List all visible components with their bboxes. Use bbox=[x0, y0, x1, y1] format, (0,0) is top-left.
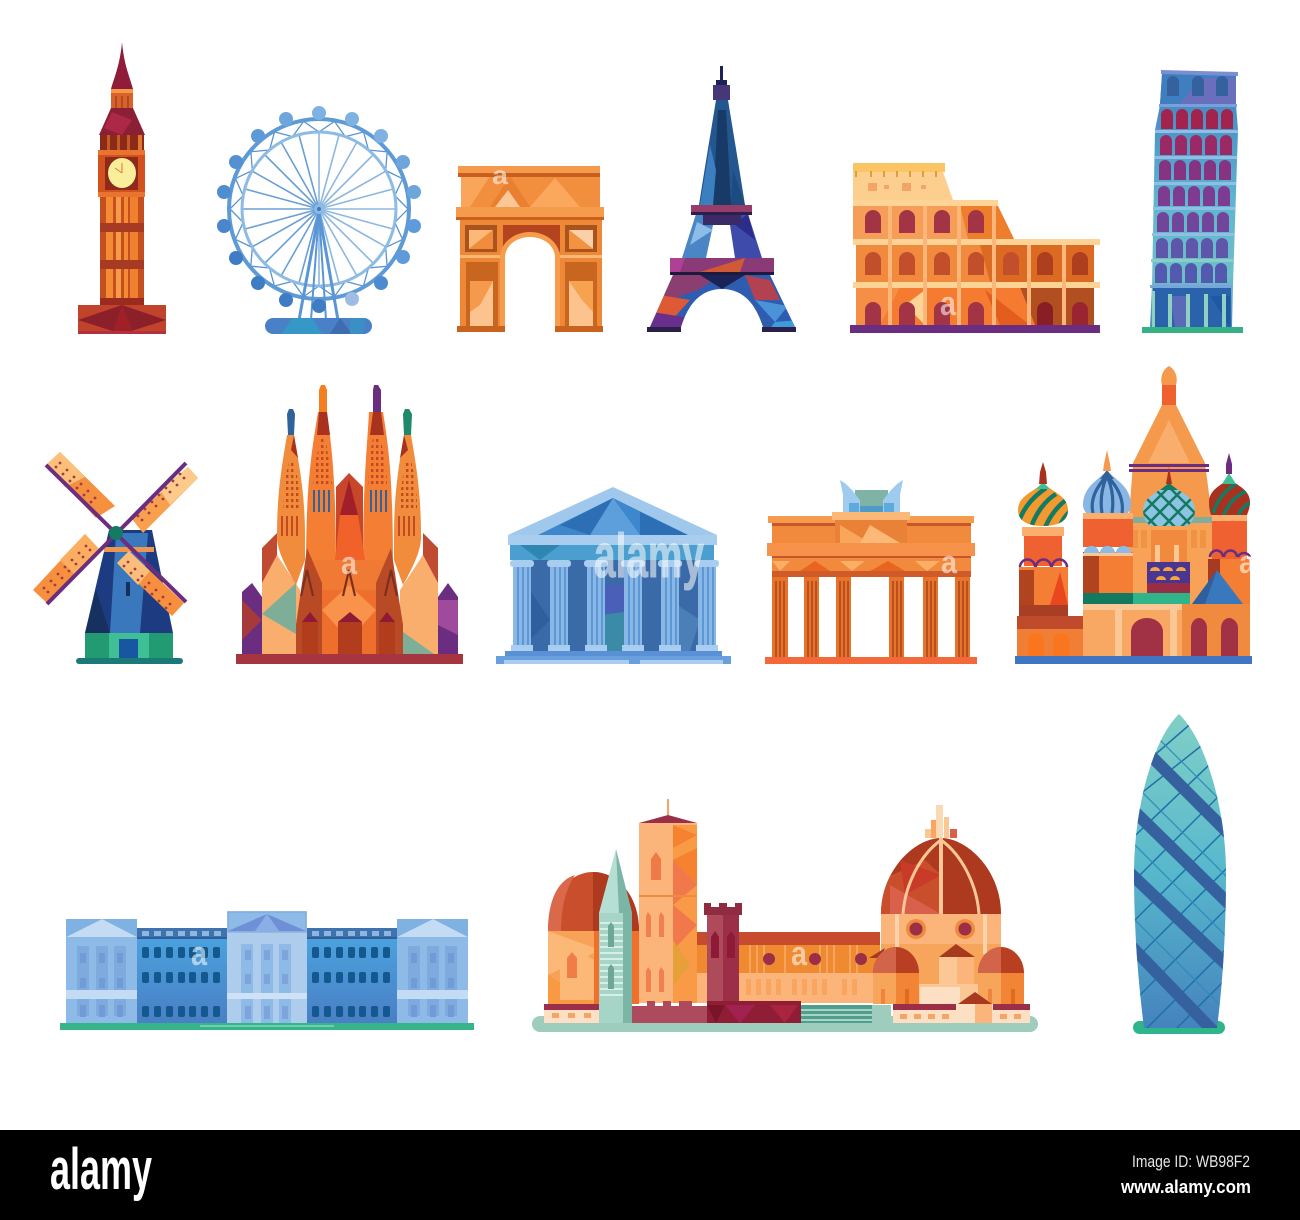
right wing bbox=[397, 919, 468, 1023]
landmark: Arc de Triomphe bbox=[456, 166, 604, 332]
patterned window bbox=[1147, 562, 1190, 593]
footer bar bbox=[0, 1130, 1300, 1220]
central pavilion bbox=[227, 911, 307, 1023]
attic bbox=[853, 163, 953, 200]
tower shaft bbox=[100, 197, 144, 305]
arches bbox=[865, 210, 1088, 325]
landmark: Leaning Tower of Pisa bbox=[1142, 70, 1243, 333]
frieze bbox=[508, 535, 717, 560]
up-right grid lines bbox=[1134, 724, 1226, 1028]
website: www.alamy.com bbox=[1120, 1177, 1251, 1197]
watermarks: a bbox=[940, 285, 957, 323]
windmill blades bbox=[33, 452, 198, 616]
pilasters bbox=[888, 206, 1066, 325]
left wing bbox=[66, 919, 137, 1023]
cornice bbox=[767, 543, 975, 577]
landmark: Brandenburg Gate bbox=[765, 480, 977, 664]
landmark: Eiffel Tower bbox=[640, 66, 800, 335]
columns bbox=[510, 560, 719, 651]
hub bbox=[109, 526, 123, 540]
central gable bbox=[335, 473, 365, 600]
capsules bbox=[217, 106, 421, 313]
tower body bbox=[1150, 74, 1238, 327]
right block bbox=[307, 928, 397, 1023]
portals bbox=[302, 612, 395, 654]
gallery arches bbox=[1155, 109, 1233, 283]
crenellated tower bbox=[704, 903, 742, 1003]
landmark: Florence skyline bbox=[532, 799, 1038, 1032]
blade shafts bbox=[46, 463, 186, 604]
wheel base bbox=[265, 318, 372, 334]
green ground bbox=[60, 1023, 474, 1030]
down-right grid lines bbox=[1134, 740, 1226, 1006]
cathedral dome bbox=[881, 838, 1001, 914]
nave bbox=[697, 932, 880, 1003]
landmark: Buckingham Palace bbox=[60, 911, 474, 1030]
columns bbox=[772, 577, 970, 657]
watermarks bbox=[191, 160, 1255, 973]
watermarks: a bbox=[791, 935, 808, 973]
blade dots bbox=[43, 462, 185, 609]
plinth bbox=[850, 325, 1100, 333]
crenellated wall bbox=[632, 1001, 801, 1023]
antenna bbox=[713, 66, 730, 100]
side wings bbox=[262, 533, 438, 654]
lower legs bbox=[650, 275, 795, 327]
attic bbox=[768, 512, 974, 543]
middle legs bbox=[682, 214, 762, 258]
purple side towers bbox=[242, 583, 458, 654]
landmark: Windmill bbox=[33, 452, 198, 664]
teal steps bbox=[801, 1005, 891, 1023]
main block bbox=[460, 220, 602, 326]
hub bbox=[314, 204, 324, 214]
cathedral annex bbox=[893, 984, 1030, 1023]
landmark: Colosseum bbox=[850, 163, 1100, 333]
attic bbox=[458, 166, 600, 207]
quadriga bbox=[840, 480, 903, 512]
outer spires bbox=[277, 409, 421, 585]
cella wall bbox=[515, 560, 710, 651]
small right dome bbox=[978, 947, 1024, 1004]
green spire tower bbox=[599, 849, 632, 1023]
landmark: Sagrada Familia bbox=[236, 385, 463, 664]
spokes bbox=[242, 132, 396, 286]
clock block bbox=[98, 150, 145, 197]
watermarks: a bbox=[492, 160, 509, 190]
small left dome bbox=[873, 947, 919, 1004]
central spire bbox=[1129, 366, 1212, 517]
left block bbox=[137, 928, 227, 1023]
landmark: London Eye bbox=[217, 106, 421, 334]
blue base bbox=[1015, 656, 1252, 664]
green base bbox=[1142, 327, 1243, 333]
platform two bbox=[670, 258, 774, 275]
central nave bbox=[1128, 517, 1212, 607]
louvers bbox=[100, 135, 144, 150]
tier two bbox=[853, 200, 1014, 239]
campanile bbox=[639, 799, 697, 1003]
mill body bbox=[85, 530, 173, 633]
base bbox=[236, 654, 463, 664]
landmark: Saint Basil's Cathedral bbox=[1015, 366, 1252, 664]
watermarks: a bbox=[191, 935, 208, 973]
ground slab bbox=[532, 1016, 1038, 1032]
spire windows bbox=[283, 437, 417, 510]
landmark: Pantheon bbox=[496, 487, 731, 664]
landmark: The Gherkin bbox=[1133, 714, 1226, 1034]
left tower bbox=[1017, 527, 1083, 656]
lattice onion dome bbox=[1143, 467, 1195, 526]
upper section bbox=[699, 100, 745, 205]
glass body bbox=[1134, 714, 1226, 1028]
blue pyramid bbox=[1192, 570, 1243, 604]
floor bands bbox=[1150, 104, 1238, 288]
lower facade bbox=[296, 548, 403, 654]
pediment bbox=[508, 487, 717, 535]
blue onion dome bbox=[1083, 450, 1131, 513]
support legs bbox=[299, 212, 338, 320]
lantern bbox=[925, 805, 957, 838]
platform one bbox=[691, 205, 752, 215]
inner spires bbox=[306, 385, 393, 570]
left dome and drum bbox=[548, 872, 639, 1004]
landmark: Big Ben bbox=[78, 42, 166, 334]
image id: Image ID: WB98F2 bbox=[1132, 1152, 1250, 1171]
watermarks: alamy bbox=[594, 522, 704, 591]
cathedral drum bbox=[881, 914, 1001, 1003]
stepped platform bbox=[496, 651, 731, 664]
front chapel gable bbox=[869, 944, 975, 984]
plinth bbox=[765, 657, 977, 664]
left annex bbox=[544, 1004, 599, 1023]
tier three bbox=[853, 239, 1100, 282]
second tower bbox=[1083, 513, 1190, 604]
archway bbox=[500, 232, 560, 330]
tower base bbox=[78, 305, 166, 334]
plinth bbox=[1133, 1021, 1225, 1034]
left onion dome bbox=[1018, 462, 1068, 526]
watermarks: a bbox=[1239, 544, 1255, 580]
alamy logo: alamy bbox=[50, 1137, 152, 1202]
feet bbox=[647, 327, 796, 332]
rim bbox=[229, 119, 409, 299]
roof and belfry bbox=[99, 42, 145, 135]
feet bbox=[457, 326, 603, 332]
green base bbox=[76, 633, 183, 664]
lower halls bbox=[1083, 604, 1250, 656]
truss bbox=[228, 118, 410, 300]
watermarks: a bbox=[941, 544, 957, 580]
diagonal bands bbox=[1134, 752, 1226, 1028]
tier four bbox=[853, 282, 1100, 325]
bell tier bbox=[1160, 70, 1238, 104]
ground arcade bbox=[1152, 288, 1231, 327]
cornice bbox=[456, 207, 604, 220]
watermarks: a bbox=[341, 545, 357, 581]
red green onion dome bbox=[1209, 453, 1250, 515]
right tower bbox=[1208, 515, 1250, 604]
